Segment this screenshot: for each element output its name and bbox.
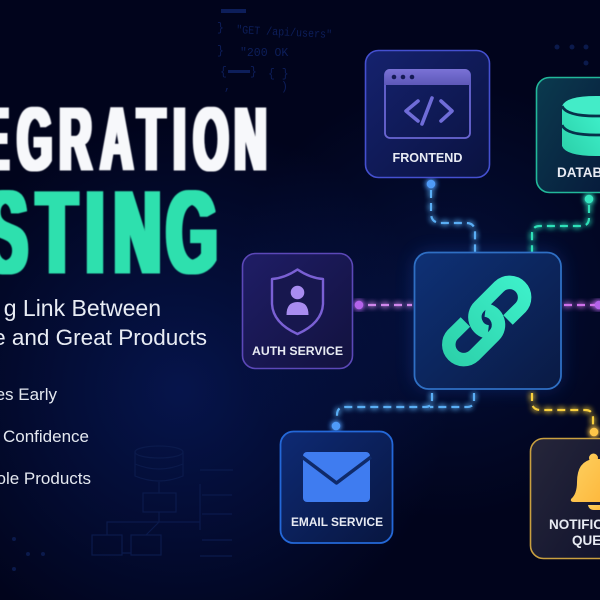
card: central link hub: [414, 252, 561, 389]
subtitle: [0, 295, 207, 350]
label: auth service: AUTH SERVICE: [252, 344, 343, 358]
icon: shield: [272, 270, 323, 334]
label: email service: EMAIL SERVICE: [291, 515, 383, 529]
card: email service: [280, 432, 392, 543]
ghost code snippet: {: [220, 66, 227, 79]
ghost database diagram: [92, 446, 233, 556]
card: database: [536, 78, 600, 192]
benefit list: Confidence: [3, 427, 89, 446]
icon: chain link: [449, 282, 525, 360]
ghost code snippet: "GET /api/users": [236, 24, 332, 42]
card: auth service: [242, 254, 352, 368]
ghost code snippet: }: [250, 66, 257, 79]
benefit list: [0, 385, 91, 488]
icon: envelope: [302, 452, 371, 502]
connector: email: [332, 393, 474, 430]
icon: bell: [571, 454, 600, 510]
card: notification queue: [530, 438, 600, 558]
subtitle: g Link Between: [4, 295, 161, 321]
connector: frontend: [427, 180, 475, 252]
connector: notification: [532, 393, 598, 436]
icon: database: [562, 96, 600, 156]
ghost code snippet: }: [217, 45, 224, 58]
ghost code snippet: ): [281, 81, 288, 94]
ghost code snippet: "200 OK: [240, 47, 288, 60]
ghost code snippet: }: [217, 22, 224, 35]
ghost code snippet: { }: [268, 68, 289, 81]
connector: auth: [355, 301, 412, 309]
label: frontend: FRONTEND: [392, 151, 462, 165]
card: frontend: [366, 50, 490, 178]
ghost code snippet: ,: [224, 81, 231, 94]
connector: database: [532, 195, 593, 252]
connector: right: [564, 301, 600, 309]
icon: code window: [384, 69, 470, 138]
ghost code snippet: [217, 9, 332, 94]
